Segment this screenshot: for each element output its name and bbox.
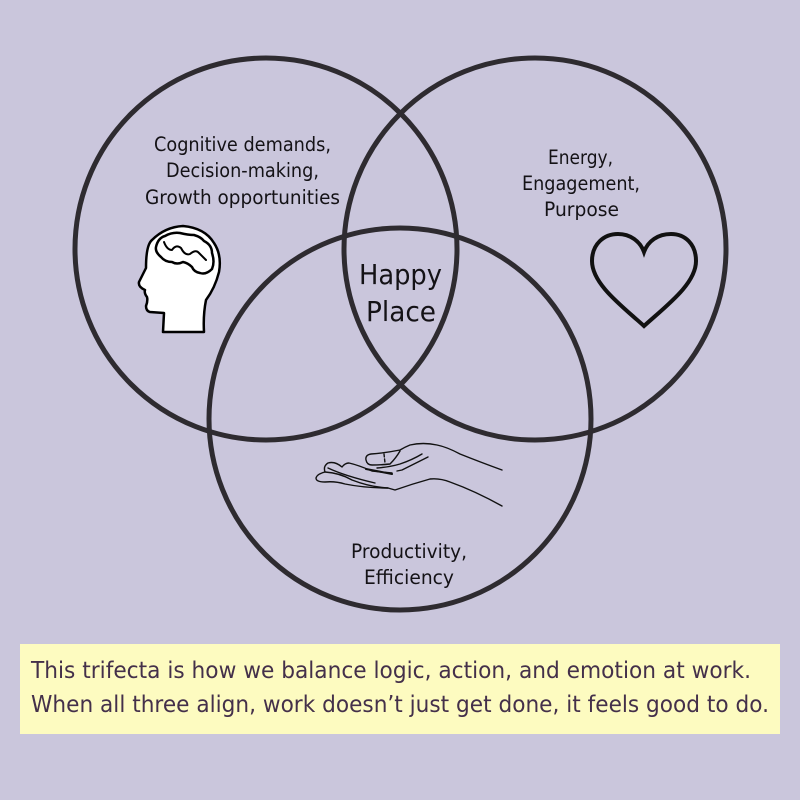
callout text: This trifecta is how we balance logic, action, and emotion at work. — [30, 656, 751, 684]
text: productivity circle: Efficiency — [364, 566, 454, 589]
text: cognitive circle — [145, 133, 340, 209]
icon: open hand — [316, 444, 502, 506]
text: cognitive circle: Decision-making, — [166, 159, 319, 182]
text: happy place centre — [359, 258, 442, 328]
icon: head with brain — [139, 226, 220, 332]
text: happy place centre: Place — [366, 295, 436, 328]
text: energy circle: Purpose — [544, 198, 619, 221]
callout text — [30, 656, 769, 718]
text: productivity circle: Productivity, — [351, 540, 467, 563]
callout: yellow summary box — [20, 644, 780, 734]
text: cognitive circle: Growth opportunities — [145, 186, 340, 209]
text: cognitive circle: Cognitive demands, — [154, 133, 331, 156]
text: happy place centre: Happy — [359, 258, 442, 291]
text: energy circle: Engagement, — [522, 172, 640, 195]
icon: heart outline — [592, 234, 696, 326]
text: energy circle: Energy, — [548, 146, 613, 169]
venn diagram: three overlapping circles — [75, 58, 726, 610]
text: energy circle — [522, 146, 640, 221]
text: productivity circle — [351, 540, 467, 589]
